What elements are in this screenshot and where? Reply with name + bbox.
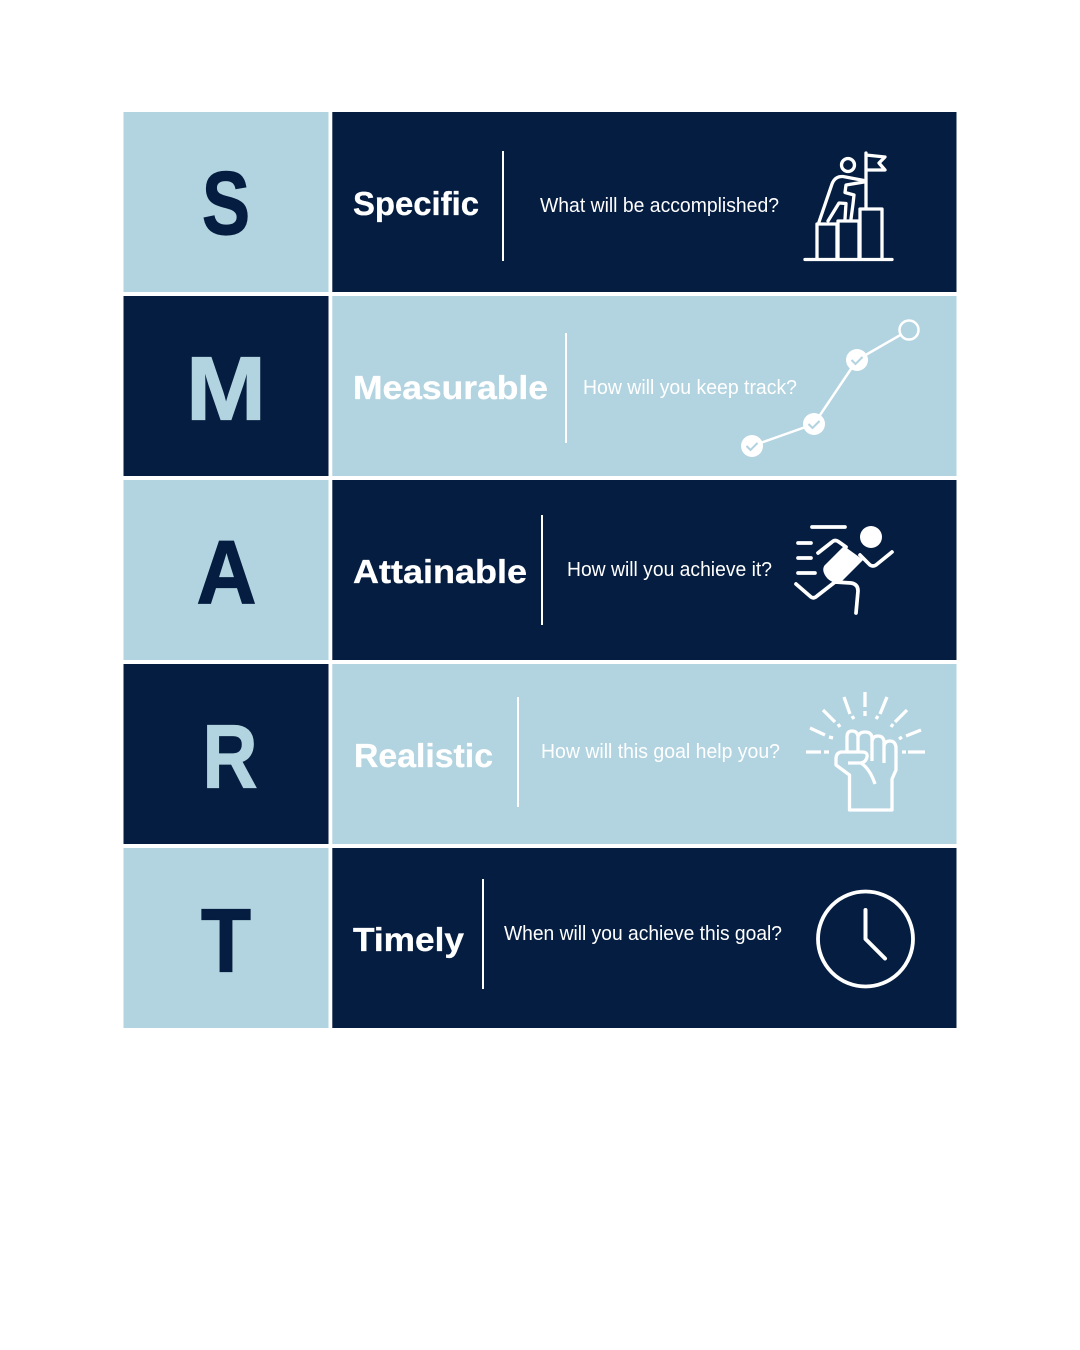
row: Realistic	[124, 664, 956, 844]
heading: Specific: Specific	[353, 185, 479, 222]
letter tile: R	[124, 664, 328, 844]
panel: Specific	[332, 112, 956, 292]
letter tile: S: S	[202, 154, 250, 254]
question: Attainable: How will you achieve it?	[567, 558, 772, 581]
icon: raised fist with rays	[806, 692, 925, 810]
heading: Attainable: Attainable	[353, 553, 527, 590]
heading: Measurable: Measurable	[353, 369, 548, 406]
panel: Timely	[332, 848, 956, 1028]
row: Attainable	[124, 480, 956, 660]
panel: Realistic	[332, 664, 956, 844]
letter tile: T: T	[201, 892, 251, 992]
letter tile: S	[124, 112, 328, 292]
icon: clock	[818, 892, 913, 986]
question: Realistic: How will this goal help you?	[541, 740, 780, 763]
row: Specific	[124, 112, 956, 292]
letter tile: T	[124, 848, 328, 1028]
panel: Measurable	[332, 296, 956, 476]
heading: Realistic: Realistic	[354, 737, 493, 774]
icon: person climbing bars to a flag	[805, 153, 892, 260]
letter tile: M	[124, 296, 328, 476]
icon: progress line with checkpoints	[741, 320, 918, 457]
heading: Timely: Timely	[353, 921, 465, 958]
letter tile: A	[124, 480, 328, 660]
panel: Attainable	[332, 480, 956, 660]
row: Timely	[124, 848, 956, 1028]
icon: running person	[796, 526, 892, 613]
letter tile: A: A	[196, 524, 256, 624]
question: Timely: When will you achieve this goal?	[504, 922, 782, 945]
row: Measurable	[124, 296, 956, 476]
letter tile: M: M	[186, 340, 266, 440]
question: Specific: What will be accomplished?	[540, 194, 779, 217]
question: Measurable: How will you keep track?	[583, 376, 797, 399]
letter tile: R: R	[202, 708, 258, 808]
